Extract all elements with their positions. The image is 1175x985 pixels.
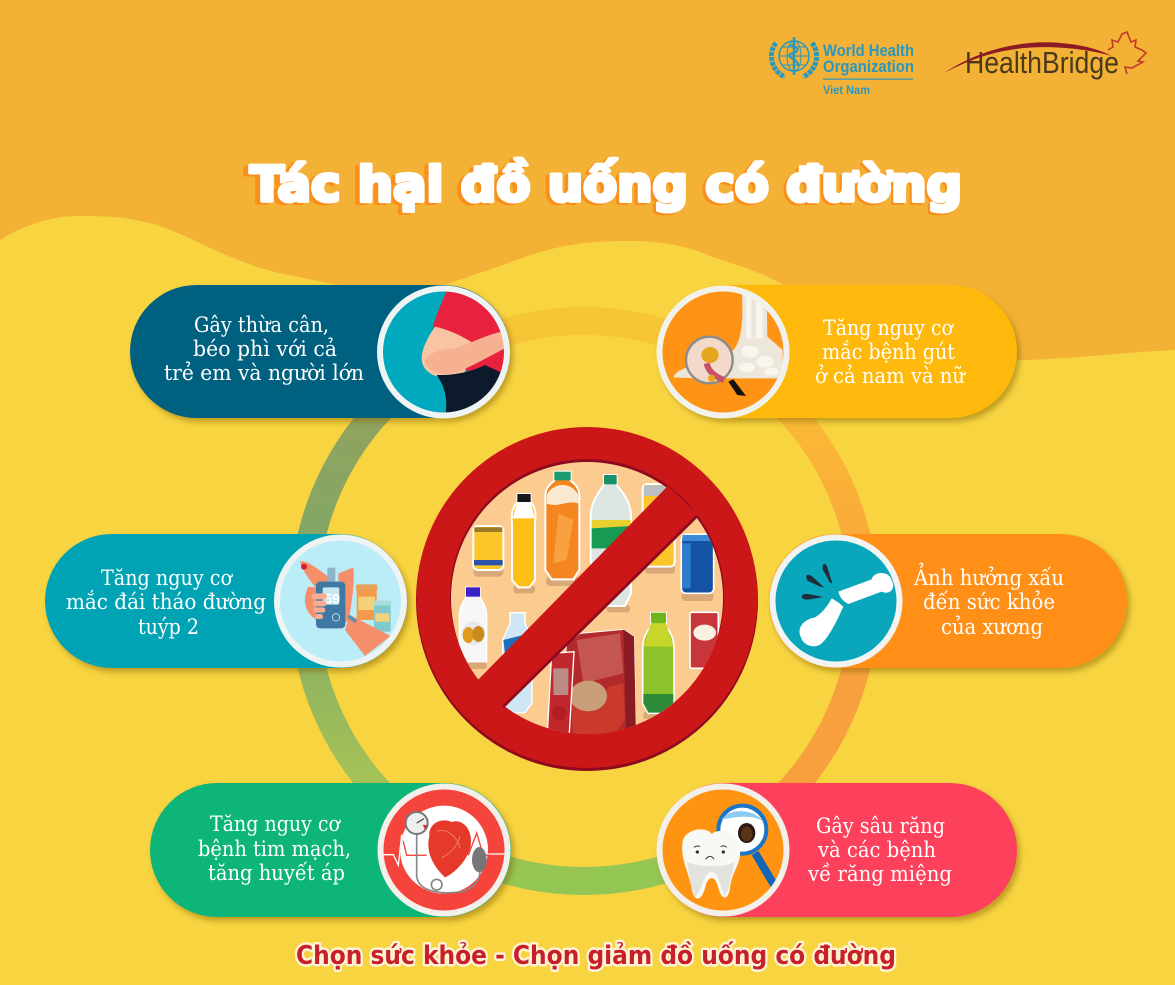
- clear soda bottle: [591, 475, 631, 606]
- text block: [198, 812, 351, 885]
- water bottle: [503, 613, 532, 713]
- text block: béo phì với cả: [193, 337, 337, 361]
- title: Tác hại đồ uống có đường: [250, 157, 962, 213]
- logo: World Health Organization Viet Nam: Viet Nam: [823, 83, 870, 97]
- pill background: [130, 285, 510, 418]
- text block: của xương: [941, 615, 1043, 639]
- icon: glucose meter: 59: [324, 590, 340, 606]
- coffee sachet: [547, 652, 574, 733]
- text block: tuýp 2: [138, 615, 199, 639]
- text block: và các bệnh: [817, 838, 936, 862]
- text block: ở cả nam và nữ: [815, 364, 966, 388]
- drinks illustration: [459, 472, 718, 735]
- prohibition bar: [478, 488, 696, 706]
- title: Tác hại đồ uống có đường: [245, 159, 960, 215]
- yellow can behind: [643, 484, 675, 567]
- icon: maple leaf: [1108, 32, 1146, 74]
- center: no sugary drinks sign: [416, 427, 758, 771]
- logo: HealthBridge: [944, 32, 1146, 80]
- text block: Tăng nguy cơ: [823, 316, 954, 340]
- text block: đến sức khỏe: [923, 590, 1055, 614]
- text block: Gây thừa cân,: [194, 313, 329, 337]
- pill background: [657, 285, 1017, 418]
- panel: tooth decay: [657, 783, 1017, 917]
- text block: về răng miệng: [807, 862, 952, 886]
- pill background: [657, 783, 1017, 917]
- pill background: [769, 534, 1127, 668]
- panel: gout: [657, 285, 1017, 418]
- red can: [690, 612, 718, 668]
- yellow bottle: [512, 494, 536, 587]
- text block: Gây sâu răng: [816, 814, 945, 838]
- text block: Ảnh hưởng xấu: [913, 564, 1064, 590]
- text block: [815, 316, 966, 388]
- text block: [913, 564, 1064, 639]
- panel: bone health: [769, 534, 1127, 668]
- pill background: [150, 783, 511, 917]
- text block: tăng huyết áp: [208, 861, 345, 885]
- drink shadows: [460, 565, 713, 719]
- green bottle: [643, 613, 674, 713]
- text block: bệnh tim mạch,: [198, 837, 351, 861]
- icon: belly: [378, 286, 513, 418]
- yellow can: [473, 526, 503, 570]
- logo: World Health Organization Viet Nam: Organization: [823, 57, 914, 76]
- blue can: [681, 534, 714, 593]
- white bottle: [459, 587, 487, 662]
- text block: [66, 566, 266, 639]
- icon: heart and blood pressure: [378, 784, 510, 916]
- logo: World Health Organization Viet Nam: World Health: [823, 41, 914, 60]
- orange bottle: [545, 472, 579, 579]
- text block: [164, 313, 364, 385]
- icon: glucose meter: [274, 535, 406, 667]
- logo: World Health Organization Viet Nam: [771, 37, 914, 97]
- panel: type 2 diabetes: [45, 534, 407, 668]
- logo: HealthBridge: HealthBridge: [965, 45, 1119, 80]
- text block: mắc đái tháo đường: [66, 590, 266, 614]
- slogan: Chọn sức khỏe - Chọn giảm đồ uống có đường: [296, 940, 896, 971]
- text block: trẻ em và người lớn: [164, 361, 364, 385]
- icon: WHO emblem: [771, 37, 817, 77]
- text block: [807, 814, 952, 886]
- panel: cardiovascular: [150, 783, 511, 917]
- text block: Tăng nguy cơ: [101, 566, 233, 590]
- text block: Tăng nguy cơ: [210, 812, 341, 836]
- panel: weight gain: [130, 285, 513, 418]
- icon: broken bone: [770, 535, 902, 667]
- pill background: [45, 534, 407, 668]
- text block: mắc bệnh gút: [822, 340, 956, 364]
- icon: foot with magnifier: [657, 286, 789, 418]
- icon: tooth and mirror: [657, 784, 789, 916]
- arc swoosh: [944, 42, 1112, 73]
- coffee box: [557, 629, 636, 735]
- connecting ring: [304, 321, 864, 881]
